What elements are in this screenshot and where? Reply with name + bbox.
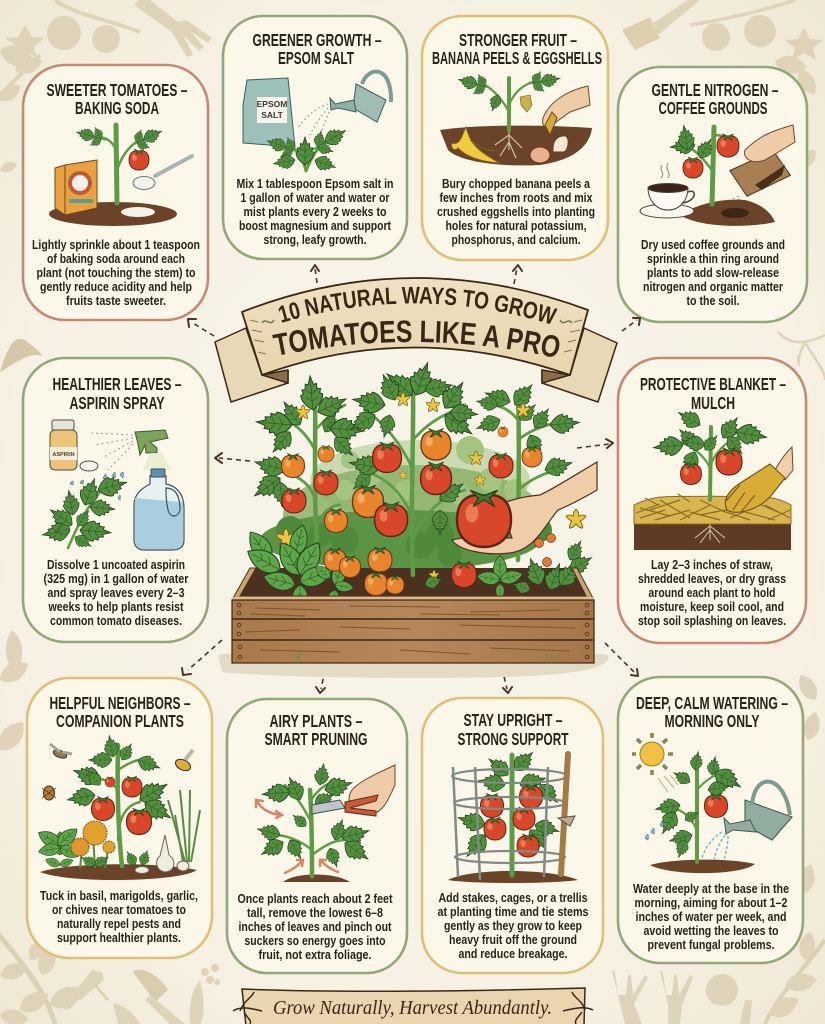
panel: gentle nitrogen — [618, 67, 807, 322]
heading — [46, 80, 188, 118]
heading: STAY UPRIGHT – — [464, 710, 563, 730]
icon: plant, coffee cup, grounds bag, hand — [640, 124, 795, 226]
heading: BANANA PEELS & EGGSHELLS — [432, 48, 602, 68]
body text: moisture, keep soil cool, and — [640, 600, 784, 614]
body text: plant (not touching the stem) to — [36, 266, 196, 280]
title line 1 — [281, 303, 553, 325]
heading: HEALTHIER LEAVES – — [52, 374, 182, 394]
body text: few inches from roots and mix — [440, 191, 592, 205]
body text — [641, 238, 785, 308]
arrow: to companion plants — [182, 640, 222, 675]
body text: around each plant to hold — [648, 586, 776, 600]
heading: EPSOM SALT — [278, 48, 354, 68]
footer right flourish — [563, 992, 593, 1024]
body text: fruits taste sweeter. — [66, 294, 166, 308]
body text: morning, aiming for about 1–2 — [634, 896, 788, 910]
body text: holes for natural potassium, — [446, 219, 586, 233]
heading — [652, 80, 779, 118]
body text: inches of water per week, and — [636, 910, 786, 924]
ribbon hatch — [250, 320, 582, 354]
heading: COFFEE GROUNDS — [658, 98, 768, 118]
body text: 1 gallon of water and water or — [240, 191, 390, 205]
arrow: to epsom salt — [311, 265, 319, 283]
icon: plant being pruned with red arrows — [256, 762, 395, 882]
heading — [432, 30, 602, 68]
arrow: to aspirin spray — [215, 453, 250, 463]
panel: healthier leaves — [23, 358, 208, 642]
body text: to the soil. — [686, 294, 740, 308]
heading: STRONGER FRUIT – — [459, 30, 577, 50]
body text: or chives near tomatoes to — [52, 903, 186, 917]
heading — [264, 711, 368, 749]
heading: AIRY PLANTS – — [270, 711, 363, 731]
body text: Lay 2–3 inches of straw, — [651, 558, 773, 572]
body text: nitrogen and organic matter — [643, 280, 783, 294]
body text: sprinkle a thin ring around — [647, 252, 779, 266]
icon: plant with banana peel, eggshells, hand — [440, 65, 592, 165]
title line 2 text: TOMATOES LIKE A PRO — [272, 320, 560, 357]
body text: Once plants reach about 2 feet — [238, 892, 393, 906]
body text: boost magnesium and support — [239, 219, 392, 233]
foliage backdrop — [260, 436, 552, 570]
icon: plant, straw mulch, gloved hand — [634, 406, 793, 550]
tomato stems — [265, 378, 560, 575]
tomato leaves — [249, 359, 580, 535]
body text: Water deeply at the base in the — [633, 882, 789, 896]
icon: sun, plant, watering can — [632, 733, 792, 873]
heading: SMART PRUNING — [264, 729, 368, 749]
arrow: to mulch — [577, 439, 613, 448]
title line 1 text: 10 NATURAL WAYS TO GROW — [278, 286, 558, 324]
illustration: raised garden bed with tomato plants — [218, 359, 608, 678]
panel: airy plants — [227, 699, 407, 973]
body text: and spray leaves every 2–3 — [48, 586, 184, 600]
title line 2 — [276, 342, 556, 358]
body text — [236, 177, 394, 247]
wooden bed — [232, 568, 594, 663]
heading: GREENER GROWTH – — [252, 30, 382, 50]
body text: Lightly sprinkle about 1 teaspoon — [32, 238, 200, 252]
body text: (325 mg) in 1 gallon of water — [44, 572, 189, 586]
body text: Dissolve 1 uncoated aspirin — [47, 558, 185, 572]
body text: naturally repel pests and — [57, 917, 181, 931]
heading: HELPFUL NEIGHBORS – — [50, 693, 191, 713]
body text: Dry used coffee grounds and — [641, 238, 785, 252]
heading — [50, 693, 191, 731]
body text — [40, 889, 198, 945]
footer banner — [233, 988, 593, 1024]
body text: prevent fungal problems. — [648, 938, 774, 952]
body text: gently reduce acidity and help — [40, 280, 192, 294]
ground shadow — [218, 651, 608, 678]
panel: greener growth — [223, 16, 407, 259]
heading — [252, 30, 382, 68]
body text: tall, remove the lowest 6–8 — [247, 906, 383, 920]
body text: Add stakes, cages, or a trellis — [438, 891, 588, 905]
body text: stop soil splashing on leaves. — [638, 614, 786, 628]
arrow: to banana peels — [513, 265, 522, 284]
arrow: to coffee grounds — [622, 318, 640, 331]
icon: epsom salt bag and watering can: EPSOM — [257, 99, 287, 109]
body text — [238, 892, 393, 962]
ribbon flourishes — [262, 320, 572, 323]
heading — [458, 710, 569, 749]
heading — [52, 374, 182, 413]
icon: aspirin bottle, sprayer, jug, leaf: ASPIRIN — [52, 452, 75, 458]
body text: heavy fruit off the ground — [449, 933, 577, 947]
heading: STRONG SUPPORT — [458, 729, 569, 749]
icon: tomato plant with companions and insects — [35, 734, 200, 880]
hand holding tomato — [452, 462, 597, 554]
body text — [437, 177, 595, 247]
panel: sweeter tomatoes — [23, 65, 208, 320]
card frame — [27, 678, 212, 958]
body text: suckers so energy goes into — [244, 934, 386, 948]
card frame — [618, 677, 803, 963]
card frame — [223, 16, 407, 259]
arrow: to baking soda — [188, 319, 214, 336]
body text: mist plants every 2 weeks to — [244, 205, 387, 219]
card frame — [23, 358, 208, 642]
card frame — [422, 698, 603, 973]
arrow: to pruning — [316, 670, 325, 693]
heading — [636, 693, 788, 731]
body text — [633, 882, 789, 952]
body text — [638, 558, 786, 628]
icon: staked and caged tomato — [448, 747, 578, 883]
panel: stronger fruit — [422, 16, 608, 260]
title ribbon — [214, 277, 618, 403]
card frame — [23, 65, 208, 320]
body text: support healthier plants. — [57, 931, 181, 945]
footer left flourish — [233, 992, 262, 1024]
heading: COMPANION PLANTS — [56, 711, 184, 731]
panel: stay upright — [422, 698, 603, 973]
ribbon tails — [215, 328, 617, 402]
card frame — [422, 16, 608, 260]
panel: protective blanket — [618, 358, 806, 643]
heading: SWEETER TOMATOES – — [46, 80, 188, 100]
icon: plant with baking soda box and spoon — [49, 119, 192, 226]
panel: deep calm watering — [618, 677, 803, 963]
heading — [640, 374, 786, 413]
ribbon body — [242, 278, 588, 375]
body text — [438, 891, 588, 961]
body text: and reduce breakage. — [458, 947, 568, 961]
body text: strong, leafy growth. — [264, 233, 366, 247]
card frame — [227, 699, 407, 973]
body text — [32, 238, 200, 308]
body text — [44, 558, 189, 628]
arrow: to watering — [605, 643, 638, 676]
footer text: Grow Naturally, Harvest Abundantly. — [273, 997, 552, 1019]
heading: ASPIRIN SPRAY — [70, 393, 165, 413]
tomato flowers — [276, 392, 586, 547]
body text: of baking soda around each — [47, 252, 185, 266]
card frame — [618, 358, 806, 643]
arrow: to support — [502, 668, 512, 693]
heading: MULCH — [691, 393, 735, 413]
footer ribbon — [242, 988, 585, 1024]
low companion plants and fallen tomatoes — [243, 523, 595, 613]
body text: shredded leaves, or dry grass — [638, 572, 786, 586]
body text: weeks to help plants resist — [48, 600, 184, 614]
tomatoes — [282, 426, 542, 536]
body text: fruit, not extra foliage. — [258, 948, 372, 962]
body text: Bury chopped banana peels a — [442, 177, 591, 191]
icon: epsom salt bag and watering can — [243, 72, 391, 174]
body text: gently as they grow to keep — [444, 919, 582, 933]
panel: helpful neighbors — [27, 678, 212, 958]
body text: Tuck in basil, marigolds, garlic, — [40, 889, 198, 903]
heading: BAKING SODA — [75, 98, 159, 118]
card frame — [618, 67, 807, 322]
body text: avoid wetting the leaves to — [644, 924, 779, 938]
body text: crushed eggshells into planting — [437, 205, 595, 219]
body text: phosphorus, and calcium. — [452, 233, 580, 247]
icon: epsom salt bag and watering can: SALT — [261, 110, 284, 120]
body text: plants to add slow-release — [647, 266, 779, 280]
heading: MORNING ONLY — [664, 711, 760, 731]
body text: at planting time and tie stems — [438, 905, 588, 919]
soil — [232, 568, 594, 600]
body text: inches of leaves and pinch out — [238, 920, 392, 934]
icon: aspirin bottle, sprayer, jug, leaf — [41, 420, 184, 551]
body text: common tomato diseases. — [50, 614, 182, 628]
body text: Mix 1 tablespoon Epsom salt in — [236, 177, 394, 191]
